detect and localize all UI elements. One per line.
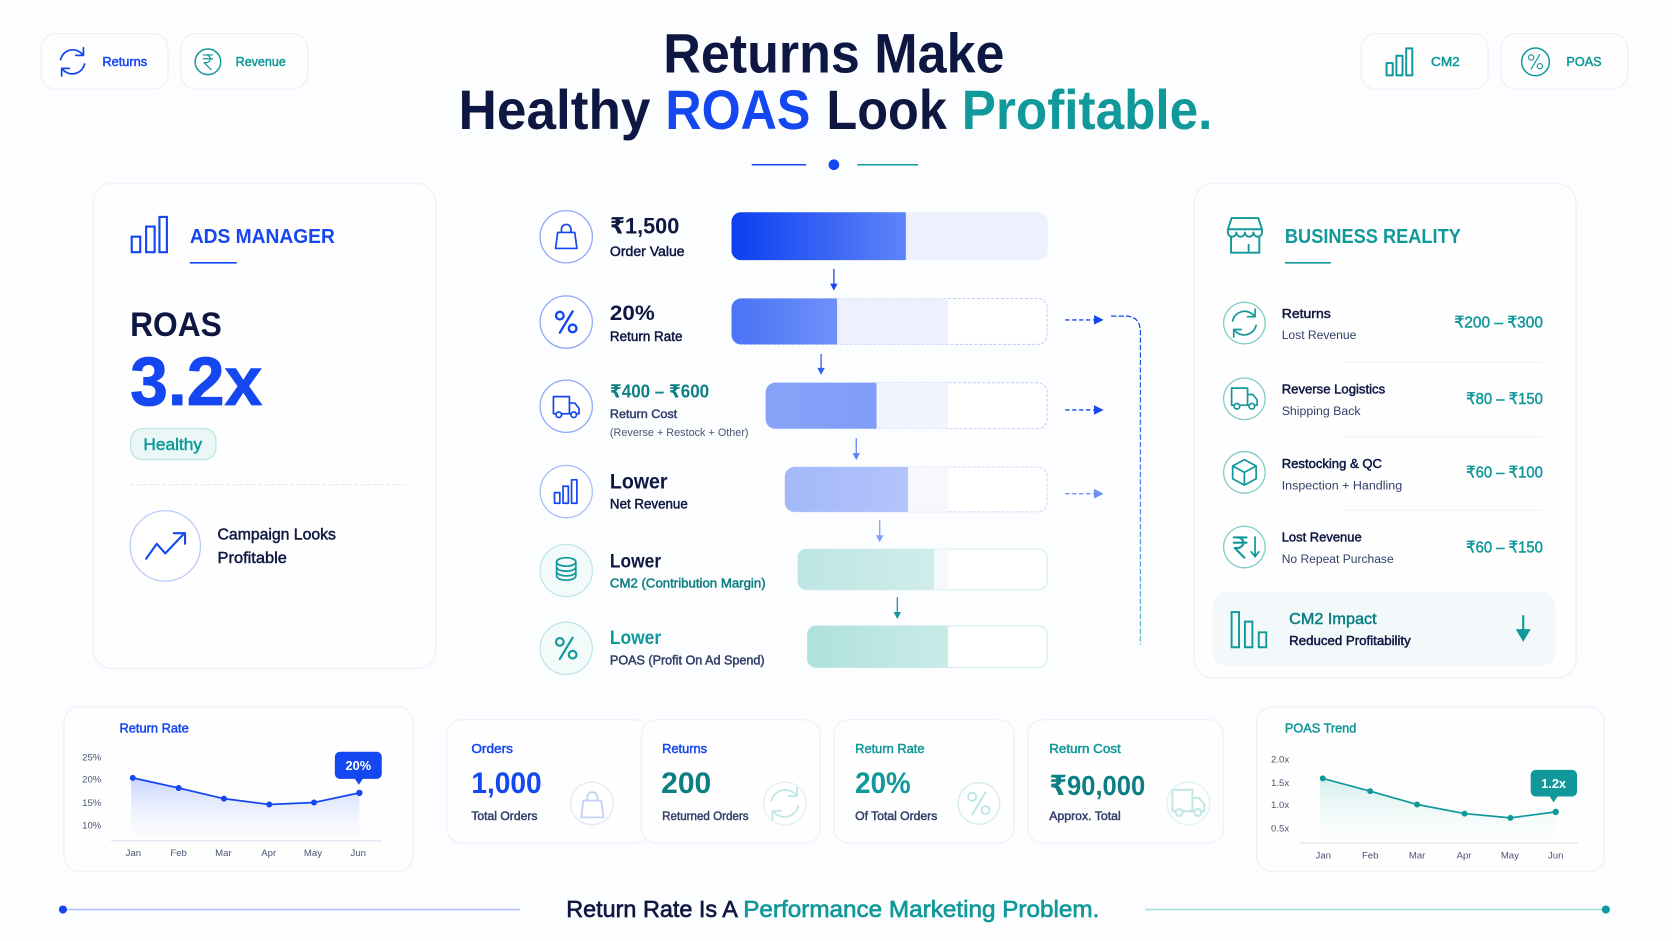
chip: Returns: Returns (102, 54, 147, 69)
chart: POAS Trend: 1.5x (1271, 778, 1289, 789)
item: Lost Revenue (1224, 526, 1543, 568)
panel: Ads Manager (93, 183, 436, 669)
chart: Return Rate: May (304, 848, 322, 859)
stat card: Orders (447, 720, 649, 843)
row: order value (540, 211, 1048, 263)
item: Returns: ₹200 – ₹300 (1454, 314, 1543, 331)
callout: campaign looks profitable: Campaign Looks (218, 527, 336, 544)
row: return rate: Return Rate (610, 328, 683, 344)
stat card: Orders: Orders (471, 741, 513, 756)
item: Returns (1224, 302, 1543, 344)
chart: Return Rate (64, 707, 413, 871)
row: order value: Order Value (610, 243, 685, 259)
badge: Healthy: Healthy (143, 435, 203, 454)
chart: Return Rate: Return Rate (119, 721, 189, 736)
chart: POAS Trend: Jan (1316, 850, 1331, 861)
callout: CM2 impact: Reduced Profitability (1289, 633, 1411, 648)
row: net revenue (540, 465, 1047, 518)
title: Look (826, 79, 947, 141)
stat card: Orders: 1,000 (471, 767, 542, 800)
stat card: Returns: Returned Orders (662, 809, 749, 823)
item: Reverse Logistics: Reverse Logistics (1282, 381, 1385, 396)
icon: store (1228, 218, 1262, 253)
stat card: Orders: Total Orders (471, 809, 537, 823)
icon: trend up (130, 511, 200, 581)
stat card: Return Cost: Approx. Total (1049, 809, 1121, 823)
item: Returns: Returns (1282, 306, 1331, 321)
stat card: Return Rate: Of Total Orders (855, 809, 937, 823)
row: CM2 (540, 544, 1047, 597)
stat card: Return Cost (1028, 720, 1224, 843)
title: Returns Make (663, 23, 1004, 85)
chart: Return Rate: 25% (82, 752, 102, 763)
chart: POAS Trend: 1.0x (1271, 800, 1289, 811)
title: Healthy (459, 79, 651, 141)
stat card: Returns (641, 720, 820, 843)
row: return cost: (Reverse + Restock + Other) (610, 427, 749, 439)
chip: Revenue (181, 34, 308, 89)
row: return cost: ₹400 – ₹600 (610, 382, 709, 402)
item: Lost Revenue: Lost Revenue (1282, 530, 1362, 545)
panel: waterfall funnel (540, 211, 1140, 674)
item: Reverse Logistics (1224, 378, 1543, 420)
callout: 20% (335, 752, 382, 785)
item: Restocking and QC: Restocking & QC (1282, 456, 1382, 471)
chart: Return Rate: 15% (82, 798, 102, 809)
chip: POAS: POAS (1566, 54, 1602, 69)
arrows: costs to business reality (1065, 315, 1140, 645)
item: Restocking and QC (1224, 452, 1543, 493)
title: Profitable. (962, 79, 1212, 141)
callout: 1.2x (1531, 770, 1577, 802)
row: net revenue: Lower (610, 469, 668, 493)
chart: POAS Trend: 2.0x (1271, 754, 1289, 765)
callout: CM2 impact (1212, 592, 1556, 666)
item: Lost Revenue: ₹60 – ₹150 (1466, 539, 1543, 556)
arrows: flow down (817, 269, 901, 619)
ROAS value: 3.2x (130, 344, 262, 420)
chip: CM2 (1361, 34, 1488, 89)
title: ROAS (665, 79, 810, 141)
icon: ads bar chart (132, 217, 167, 252)
callout: 1.2x: 1.2x (1541, 776, 1567, 791)
item: Returns: Lost Revenue (1282, 328, 1357, 342)
item: Restocking and QC: ₹60 – ₹100 (1466, 465, 1543, 482)
chart: Return Rate: Jan (126, 848, 141, 859)
heading: Ads Manager: ADS MANAGER (190, 226, 335, 248)
row: return rate: 20% (610, 301, 655, 325)
title divider (752, 159, 918, 170)
callout: campaign looks profitable: Profitable (218, 550, 287, 567)
heading: Business Reality: BUSINESS REALITY (1285, 226, 1461, 248)
row: net revenue: Net Revenue (610, 496, 688, 512)
chart: POAS Trend: 0.5x (1271, 824, 1289, 835)
chart: POAS Trend: Mar (1409, 850, 1426, 861)
callout: CM2 impact: CM2 Impact (1289, 611, 1377, 628)
footer statement: Return Rate Is A (566, 896, 738, 922)
stat card: Return Rate: Return Rate (855, 741, 925, 756)
chart: Return Rate: Mar (215, 848, 232, 859)
item: Reverse Logistics: Shipping Back (1282, 404, 1361, 418)
row: POAS (540, 622, 1047, 674)
stat card: Returns: 200 (661, 767, 711, 800)
chart: Return Rate: Feb (170, 848, 187, 859)
row: return rate (540, 296, 1047, 348)
panel: Business Reality (1194, 183, 1576, 678)
chart: Return Rate: 20% (82, 775, 102, 786)
row: order value: ₹1,500 (610, 214, 679, 239)
chart: POAS Trend: May (1501, 850, 1519, 861)
row: CM2: Lower (610, 551, 662, 572)
stat card: Return Rate (834, 720, 1014, 843)
callout: 20%: 20% (346, 758, 372, 773)
stat card: Return Cost: Return Cost (1049, 741, 1121, 756)
chart: Return Rate: 10% (82, 821, 102, 832)
row: return cost (540, 380, 1047, 439)
stat card: Return Rate: 20% (855, 767, 911, 800)
chip: CM2: CM2 (1431, 54, 1460, 69)
chart: POAS Trend: Feb (1362, 850, 1378, 861)
stat card: Return Cost: ₹90,000 (1049, 770, 1145, 801)
chip: Revenue: Revenue (236, 54, 286, 69)
chart: POAS Trend: Apr (1457, 850, 1472, 861)
chip: Returns (41, 34, 168, 89)
item: Restocking and QC: Inspection + Handling (1282, 478, 1402, 492)
badge: Healthy (131, 429, 216, 460)
chart: POAS Trend (1257, 707, 1604, 871)
footer statement (566, 896, 1099, 922)
chart: POAS Trend: Jun (1548, 850, 1563, 861)
chart: Return Rate: Jun (351, 848, 366, 859)
stat card: Returns: Returns (662, 741, 707, 756)
footer statement: Performance Marketing Problem. (743, 896, 1099, 922)
row: CM2: CM2 (Contribution Margin) (610, 576, 766, 591)
item: Lost Revenue: No Repeat Purchase (1282, 552, 1394, 566)
footer rule: left (59, 905, 520, 914)
chart: POAS Trend: POAS Trend (1285, 721, 1356, 736)
callout: campaign looks profitable (218, 527, 336, 567)
chart: Return Rate: Apr (261, 848, 277, 859)
row: POAS: POAS (Profit On Ad Spend) (610, 652, 765, 667)
title (459, 23, 1212, 141)
footer rule: right (1145, 905, 1610, 914)
ROAS label: ROAS (130, 306, 222, 344)
row: POAS: Lower (610, 628, 662, 649)
chip: POAS (1501, 34, 1628, 89)
row: return cost: Return Cost (610, 407, 678, 421)
item: Reverse Logistics: ₹80 – ₹150 (1466, 391, 1543, 408)
